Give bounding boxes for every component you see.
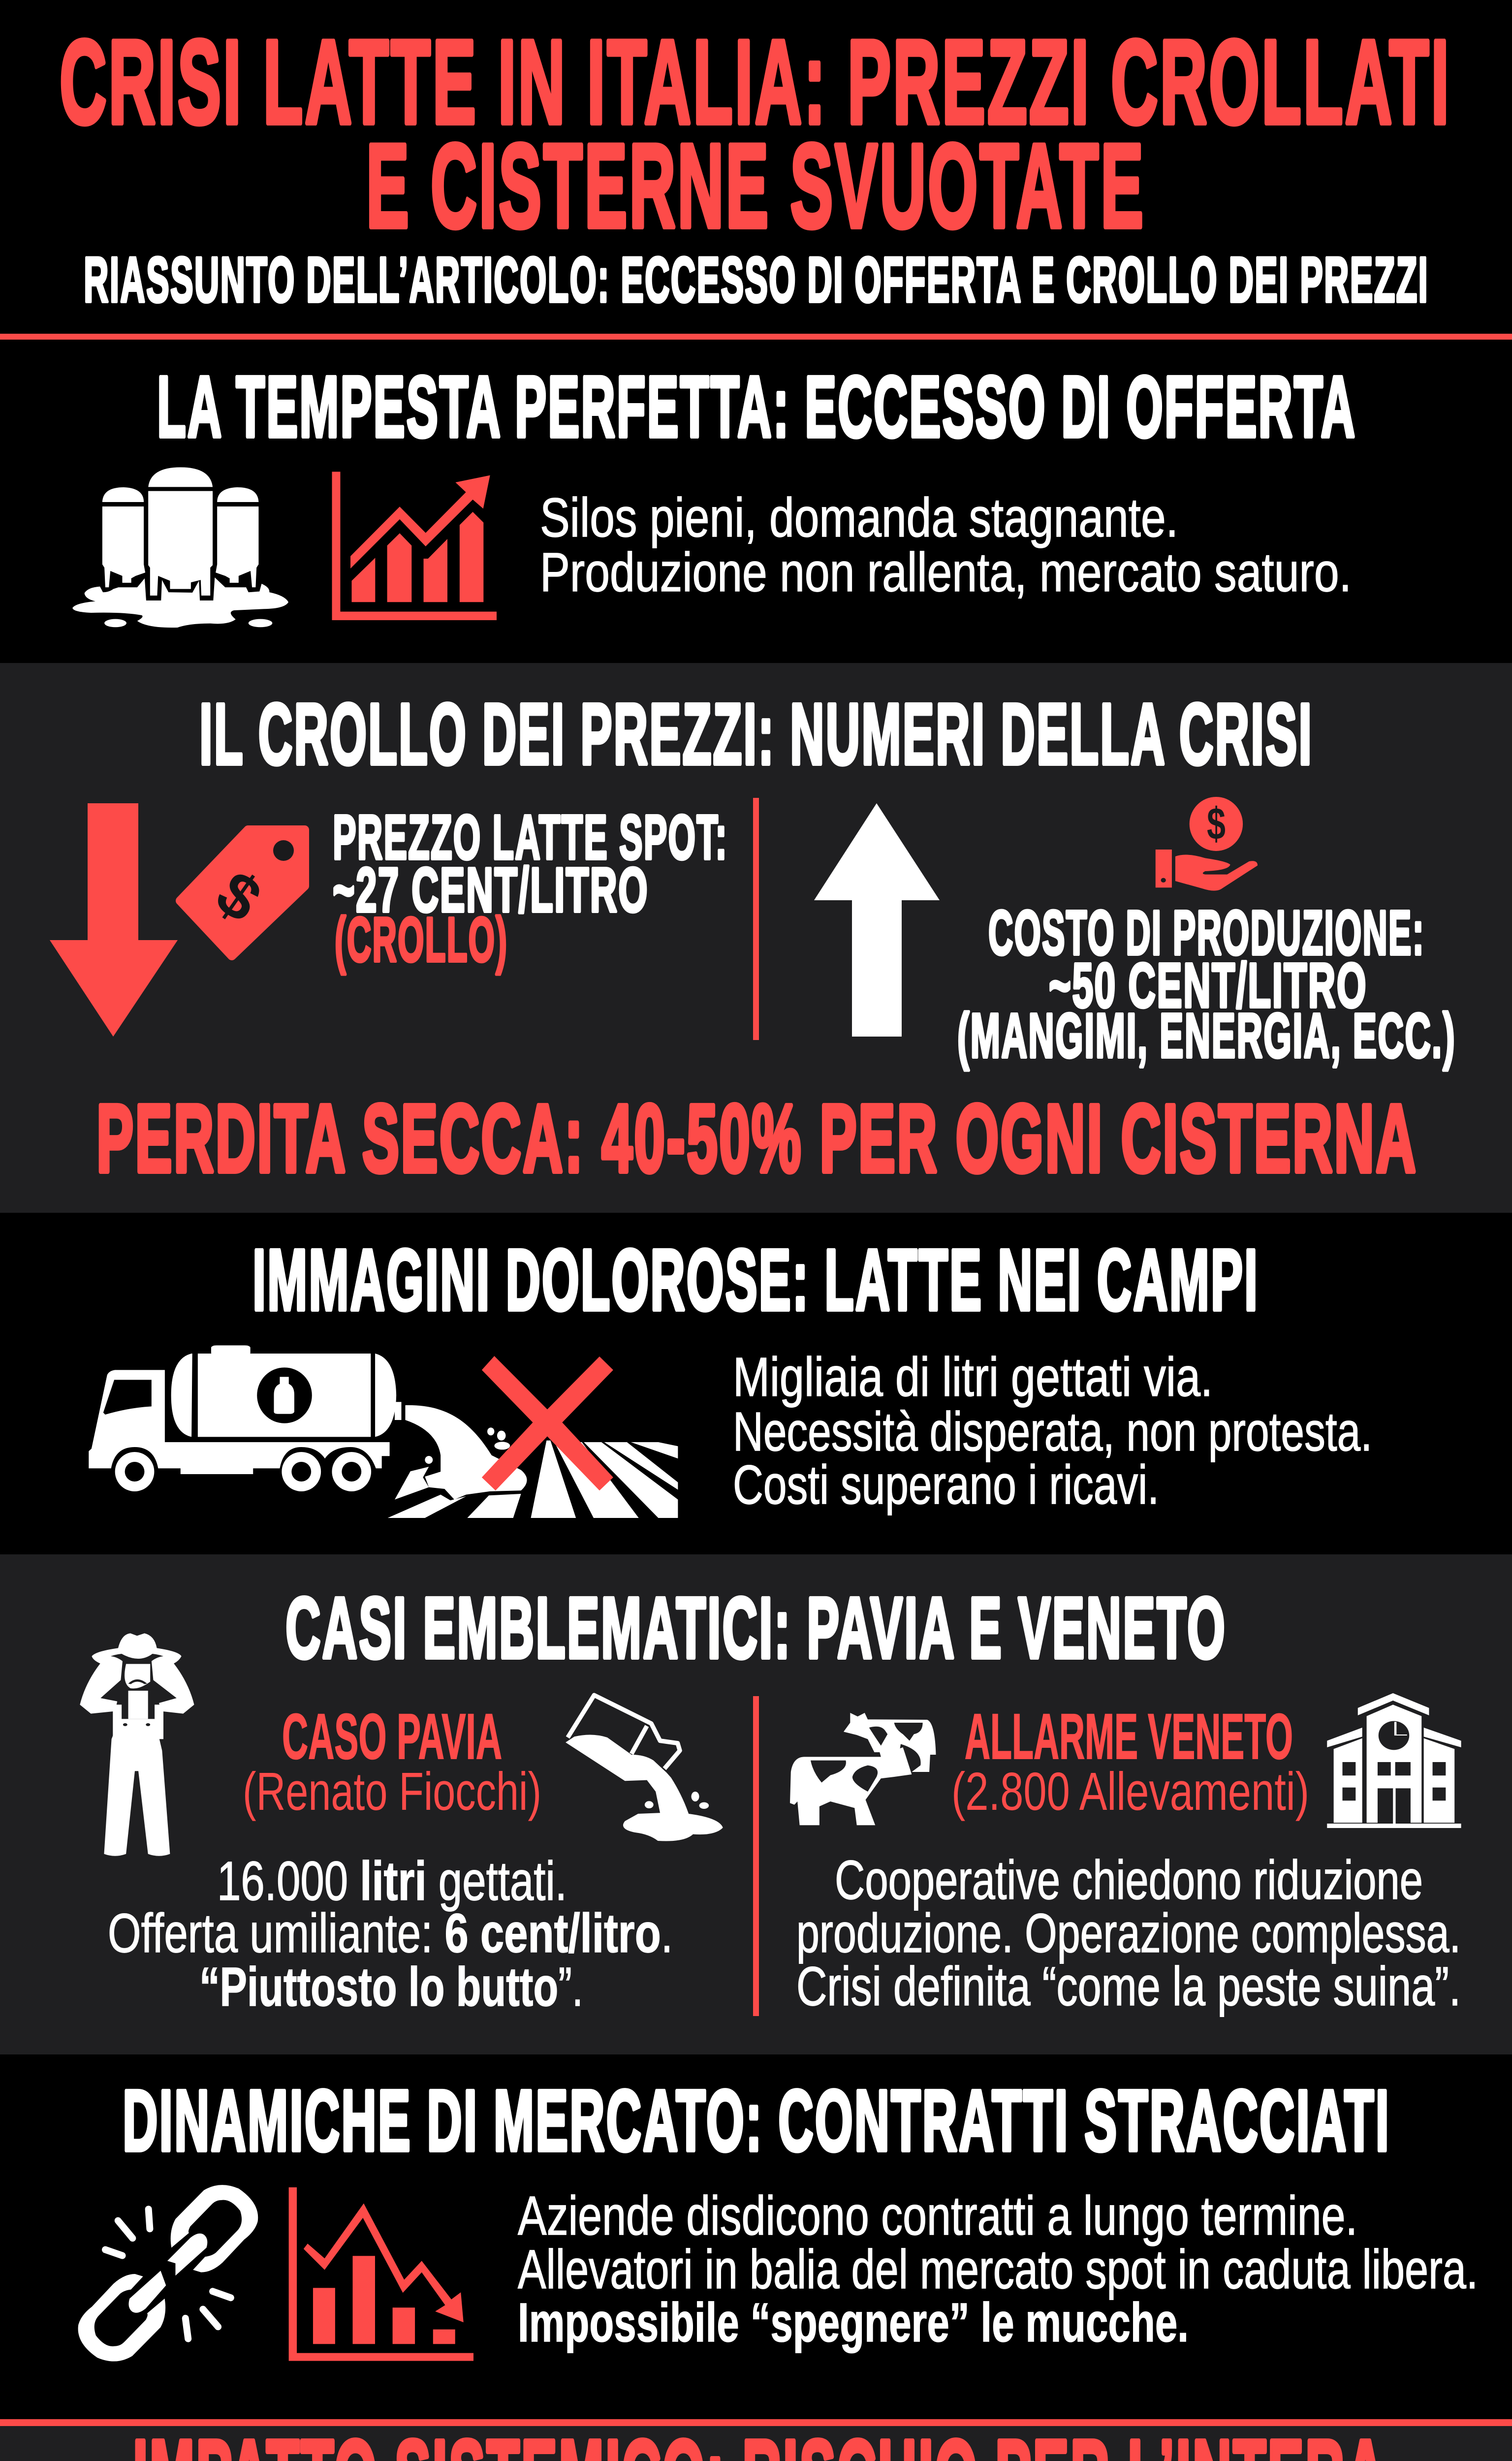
title (60, 16, 1451, 252)
text: spot price (333, 802, 728, 975)
text: pavia body: “Piuttosto lo butto”. (199, 1956, 583, 2018)
icon: rising chart (332, 472, 497, 620)
text: allarme veneto: (2.800 Allevamenti) (951, 1762, 1309, 1822)
text block: Silos pieni, domanda stagnante. (540, 487, 1178, 548)
icon: price tag: $ (204, 856, 274, 936)
icon: desperate farmer (80, 1633, 194, 1856)
text block: Produzione non rallenta, mercato saturo. (540, 541, 1352, 603)
text: pavia body (108, 1850, 673, 2018)
text block: Impossibile “spegnere” le mucche. (518, 2292, 1189, 2353)
text: caso pavia (243, 1700, 541, 1822)
panel: la tempesta perfetta (0, 340, 1512, 663)
text block (540, 487, 1352, 603)
text: caso pavia: (Renato Fiocchi) (243, 1762, 541, 1822)
text: allarme veneto (951, 1700, 1309, 1822)
panel: header (0, 0, 1512, 334)
panel: dinamiche di mercato (0, 2054, 1512, 2419)
text: pavia body: Offerta umiliante: 6 cent/litro. (108, 1902, 673, 1964)
icon: overflowing silos (72, 467, 288, 628)
text: spot price: (CROLLO) (335, 905, 508, 975)
panel: immagini dolorose (0, 1213, 1512, 1554)
arrow: cost up (814, 803, 940, 1037)
icon: falling chart (289, 2187, 473, 2361)
panel: impatto sistemico (0, 2420, 1512, 2461)
arrow: price down (50, 803, 178, 1037)
icon: price tag (180, 830, 305, 956)
icon: hand with coin (1156, 797, 1258, 891)
text block: Costi superano i ricavi. (733, 1454, 1159, 1515)
text: caso pavia: CASO PAVIA (282, 1700, 502, 1772)
text: spot price: ~27 CENT/LITRO (333, 855, 649, 925)
icon: broken chain (78, 2185, 258, 2362)
icon: tanker dumping milk on a field (89, 1345, 678, 1518)
panel: il crollo dei prezzi (0, 663, 1512, 1213)
icon: pouring milk (566, 1695, 723, 1841)
text: veneto body (796, 1849, 1461, 2017)
icon: hand with coin: $ (1207, 799, 1226, 849)
text block (733, 1346, 1372, 1515)
icon: cooperative building (1327, 1693, 1461, 1828)
text: production cost (957, 898, 1456, 1071)
icon: cows (790, 1713, 936, 1825)
text: pavia body: 16.000 litri gettati. (217, 1850, 567, 1912)
text: spot price: PREZZO LATTE SPOT: (333, 802, 728, 873)
text block: Migliaia di litri gettati via. (733, 1346, 1213, 1408)
panel: casi emblematici (0, 1554, 1512, 2054)
text block (518, 2185, 1478, 2353)
